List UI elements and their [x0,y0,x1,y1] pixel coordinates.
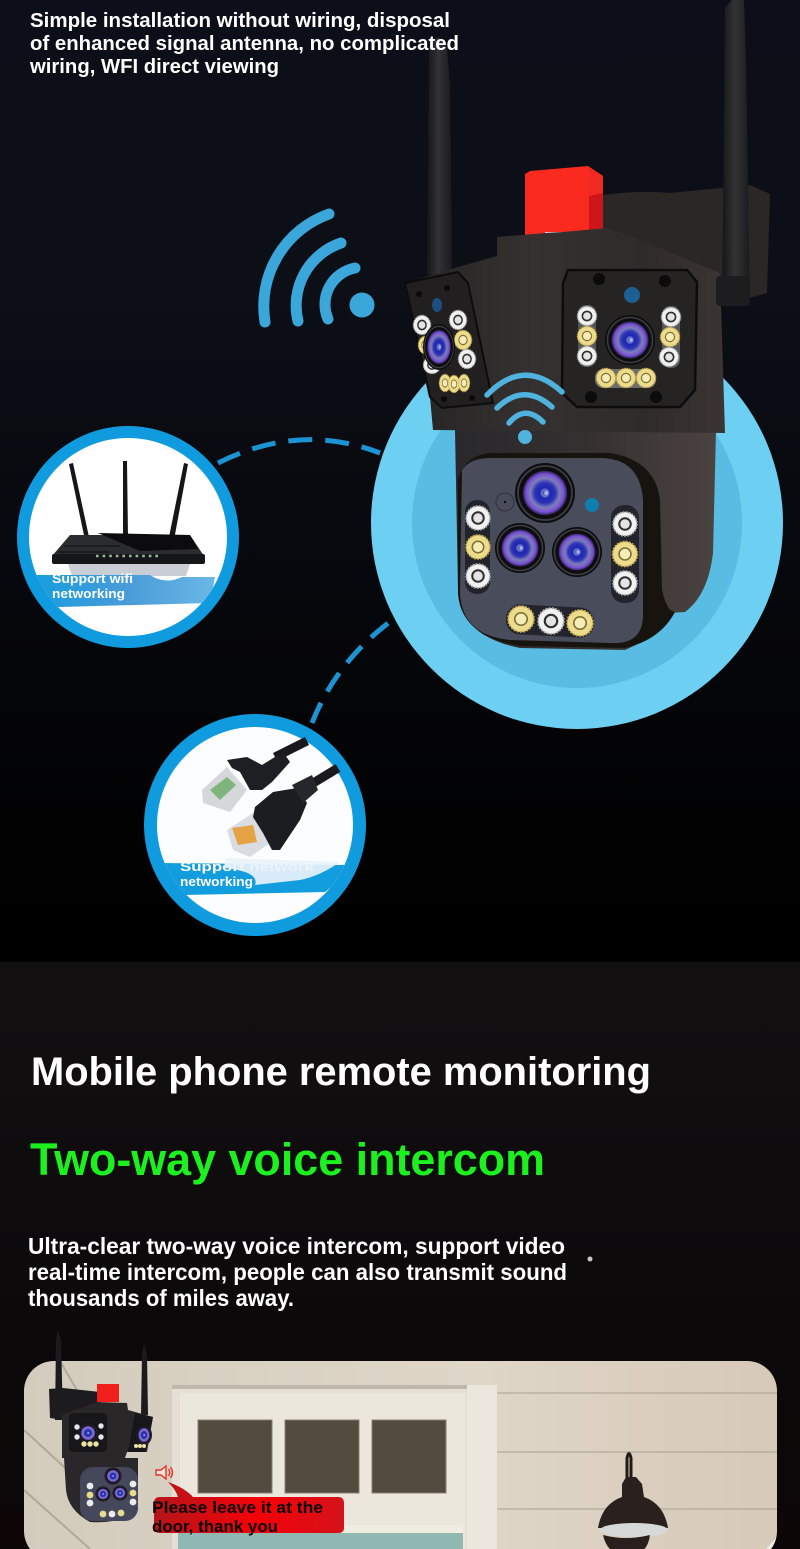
wall siding lines [497,1393,777,1509]
background: lower dark section [0,962,800,1549]
triple lens front panel [460,458,643,643]
cable caption [180,859,315,889]
small camera right face [128,1413,153,1452]
large light blue circle behind camera [371,317,783,729]
small camera left face [69,1413,107,1452]
right camera face [562,270,697,407]
installation description text: of enhanced signal antenna, no complicated [30,33,459,55]
dashed connector: router to camera [218,440,380,463]
intercom description text: thousands of miles away. [28,1285,294,1311]
recess around front panel [458,453,675,648]
router caption: networking [52,586,125,601]
blue text band [25,575,215,607]
door glass [178,1525,463,1549]
circle: network cable [144,714,366,936]
intercom description text [28,1233,567,1311]
photo panel: house porch [24,1361,777,1549]
blue text band [160,863,345,895]
cable caption: Support network [180,859,315,874]
circle: wifi router [17,426,239,648]
camera: small porch camera [49,1330,153,1522]
heading: mobile phone remote monitoring: Mobile phone remote monitoring [31,1050,651,1094]
heading: two-way voice intercom: Two-way voice intercom [30,1134,545,1185]
speck [588,1256,592,1262]
icon: red speaker [156,1466,172,1479]
router icon [52,461,205,576]
ethernet cables icon [202,741,338,857]
installation description text: wiring, WFI direct viewing [29,56,279,78]
small camera triple lens panel [80,1467,138,1521]
speech bubble text: door, thank you [152,1517,278,1536]
antenna left [427,38,452,275]
speech bubble text [152,1498,323,1536]
speech bubble text: Please leave it at the [152,1498,323,1517]
window frame [172,1389,467,1549]
router caption: Support wifi [52,571,133,586]
speech bubble [152,1482,344,1536]
left camera face [405,272,493,408]
red safety tag [525,166,603,242]
white wash over caption [225,858,340,885]
icon: large wifi signal [264,214,374,322]
router caption [52,571,133,601]
cable caption: networking [180,874,253,889]
camera: large product illustration [405,0,770,650]
upper housing [405,228,725,433]
intercom description text: Ultra-clear two-way voice intercom, support video [28,1233,565,1259]
installation description text [29,10,459,78]
wall lamp [598,1454,668,1549]
intercom description text: real-time intercom, people can also transmit sound [28,1259,567,1285]
lower rotating body [455,430,716,650]
corner highlight [766,1537,777,1549]
antenna right [716,0,750,306]
installation description text: Simple installation without wiring, disposal [30,10,450,32]
icon: small wifi on camera [487,375,562,444]
rear mounting bracket [603,185,770,305]
background: upper dark section [0,0,800,962]
dashed connector: network cable to camera [312,621,391,723]
window panes [198,1420,446,1493]
